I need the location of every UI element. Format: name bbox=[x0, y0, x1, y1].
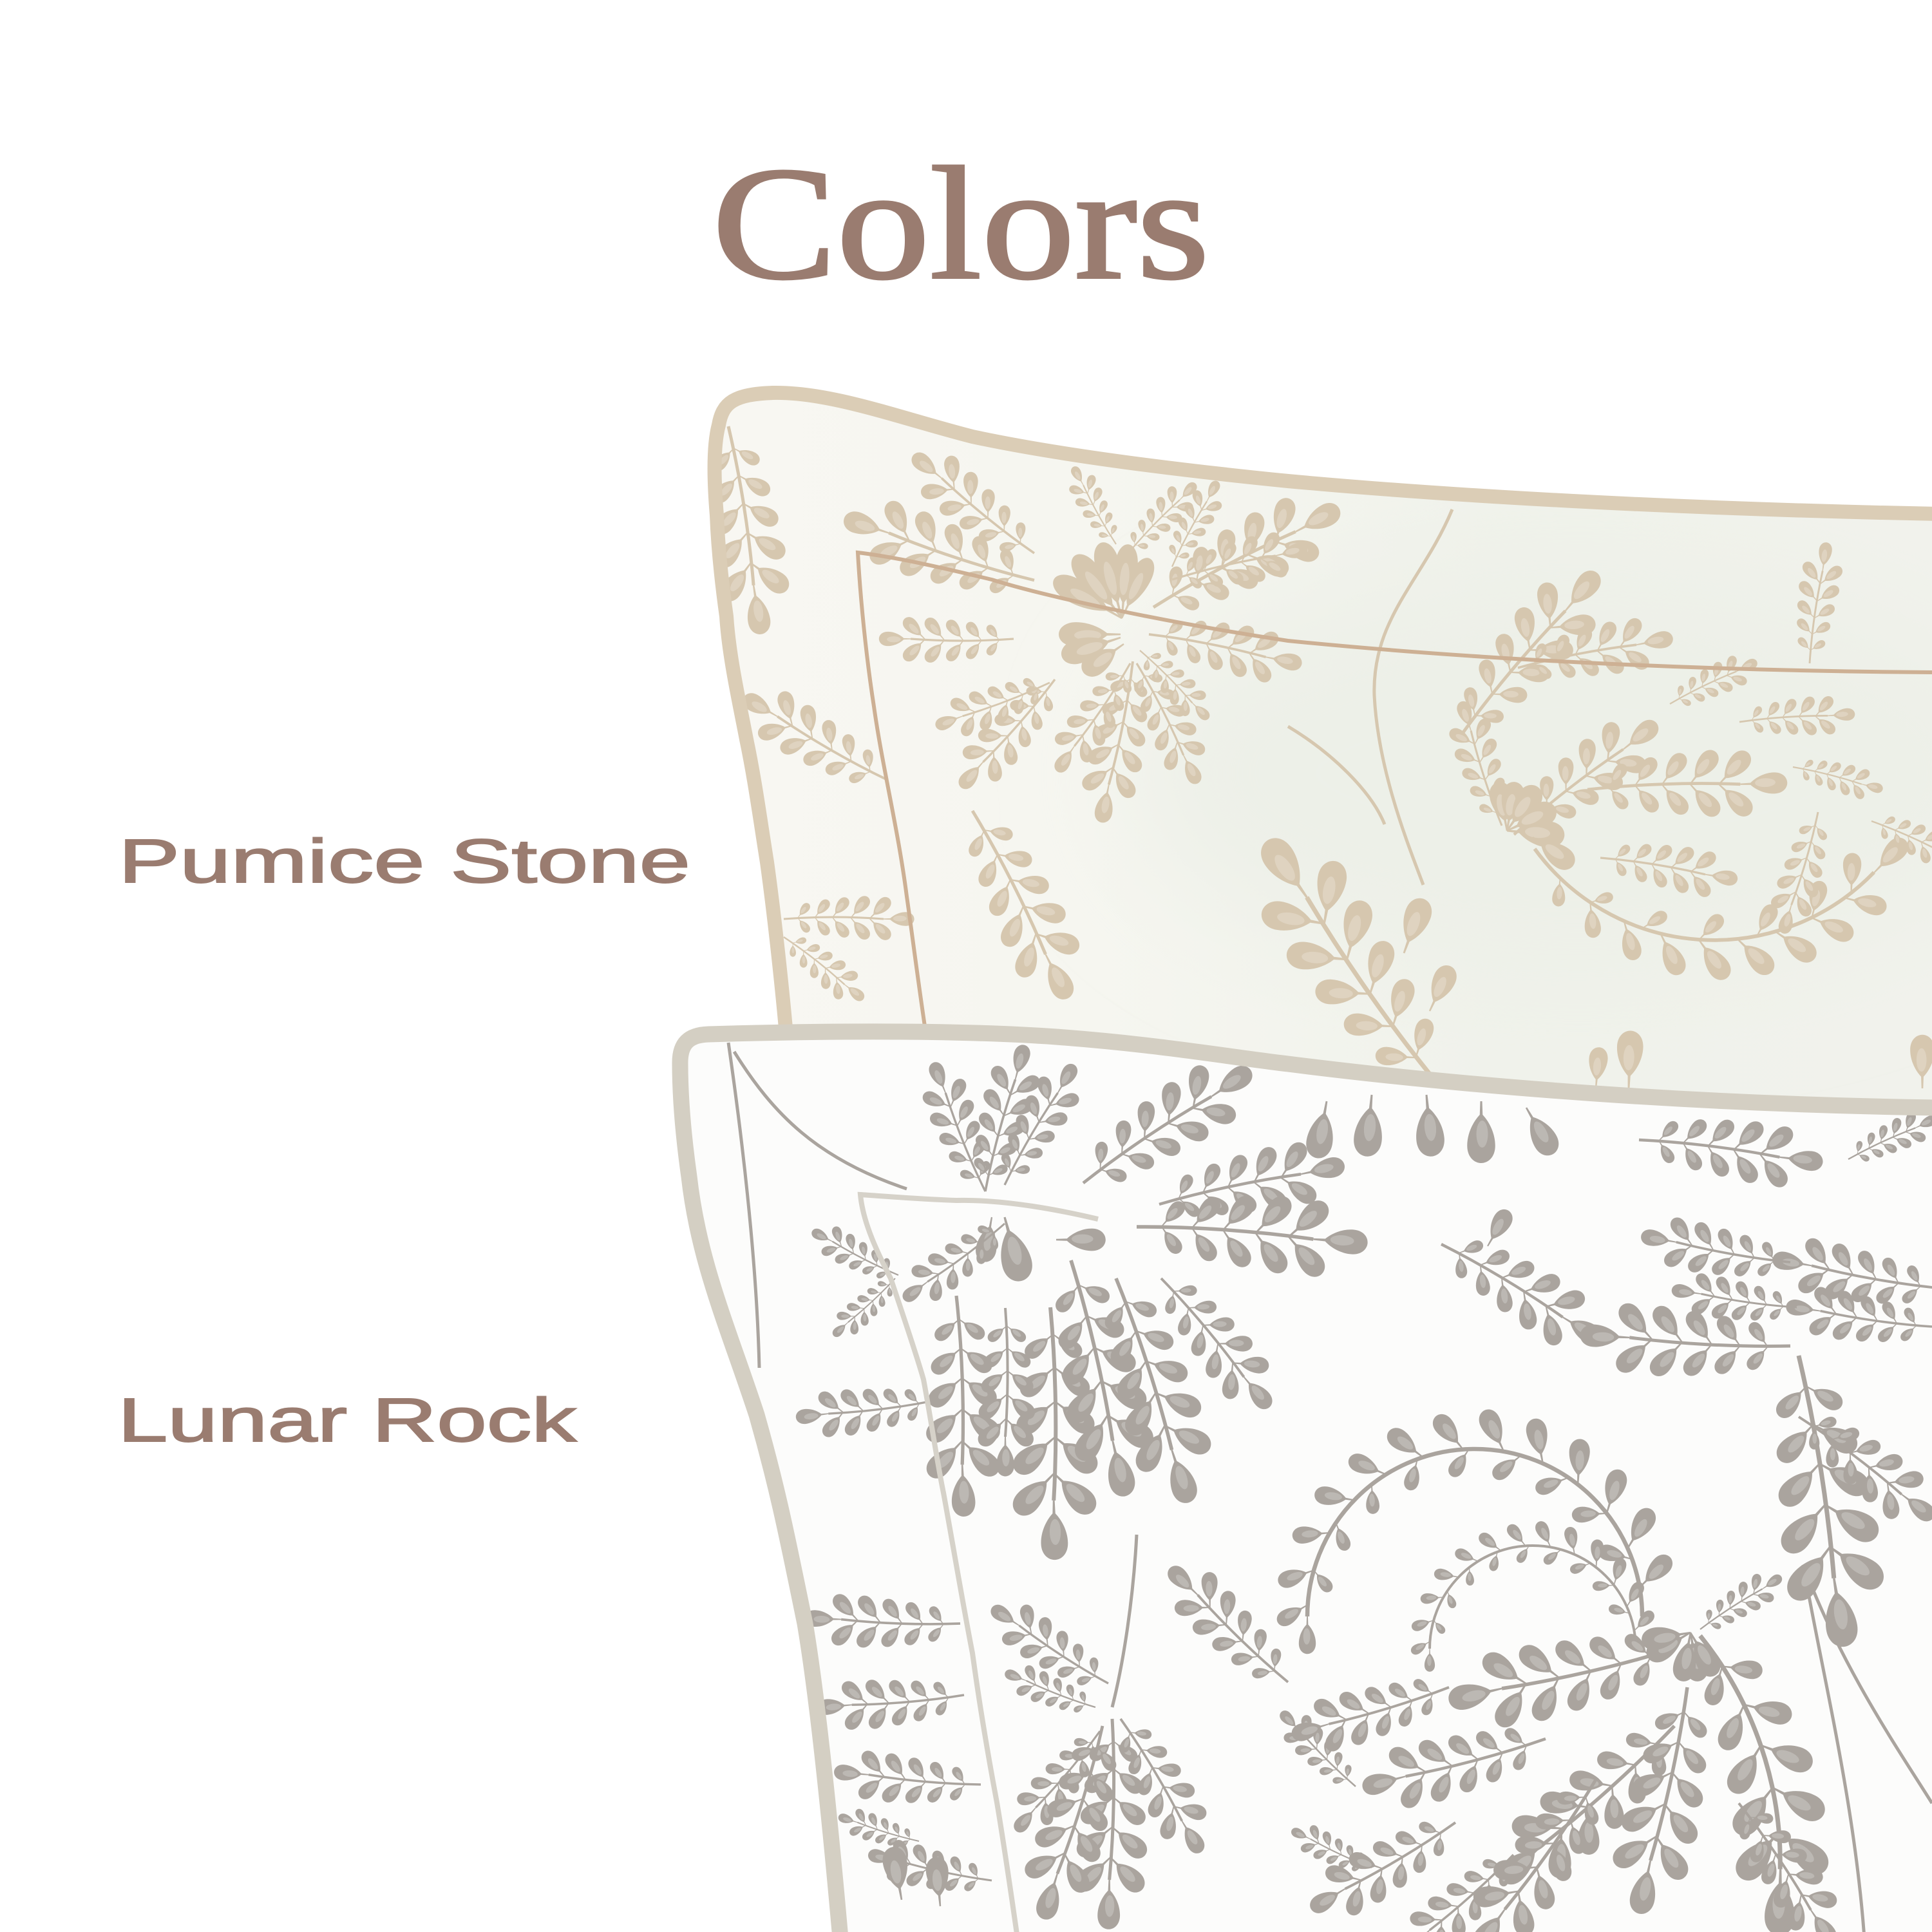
panel: Lunar Rock pillow bbox=[680, 1032, 1932, 1932]
title: Colors bbox=[712, 135, 1209, 313]
label: Pumice Stone: Pumice Stone bbox=[118, 827, 690, 896]
stitched flange line: Pumice Stone bbox=[858, 553, 1932, 1030]
piping: Lunar Rock edge bbox=[680, 1032, 1932, 1932]
pattern: Pumice Stone leaf sprays bbox=[690, 420, 1932, 1115]
label: Lunar Rock: Lunar Rock bbox=[118, 1386, 577, 1455]
stitched flange line: Lunar Rock bbox=[860, 1195, 1098, 1932]
pattern: Lunar Rock leaf sprays bbox=[728, 1037, 1932, 1932]
soft fabric shading bbox=[1127, 567, 1932, 979]
piping: Pumice Stone edge bbox=[715, 393, 1932, 1043]
panel: Pumice Stone pillow bbox=[690, 393, 1932, 1159]
